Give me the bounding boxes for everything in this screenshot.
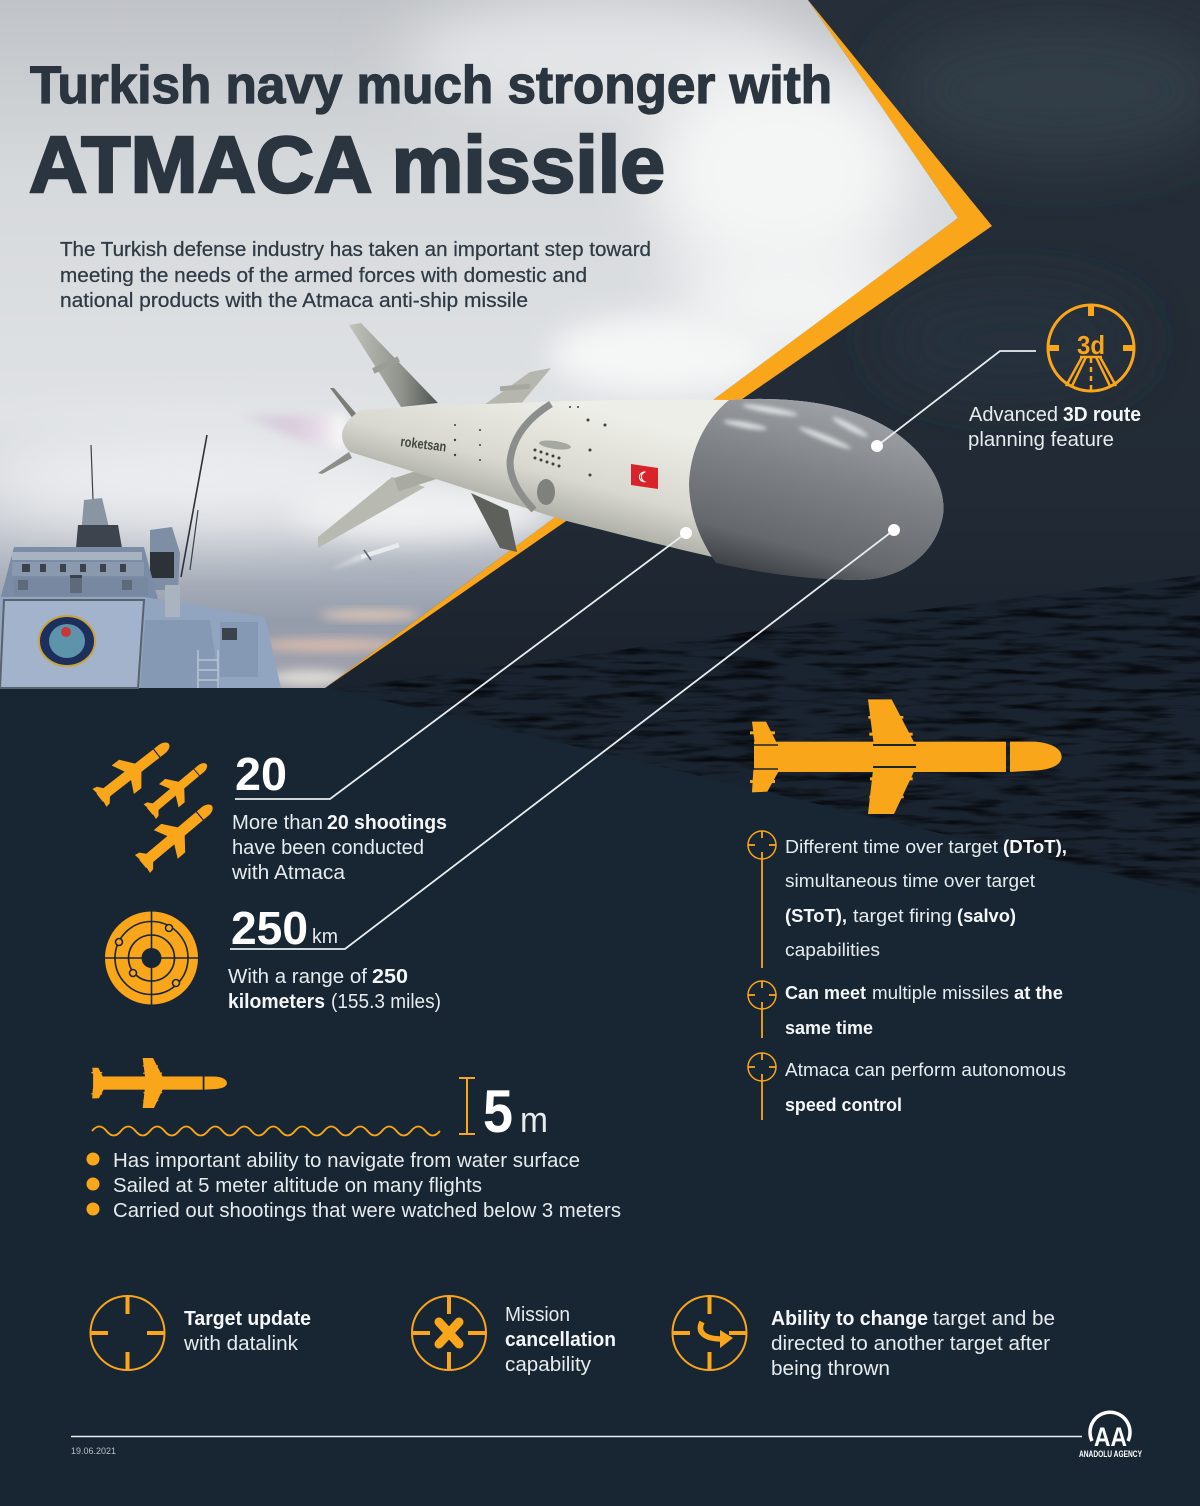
- turkish flag: [631, 464, 658, 489]
- background: dark sea: [325, 570, 1200, 905]
- missile exhaust: [240, 415, 345, 450]
- missile body: [342, 399, 943, 580]
- capability list: multiple missiles: Can meet: [785, 982, 866, 1003]
- icon: radar target: [105, 911, 198, 1005]
- altitude marker: [459, 1078, 475, 1134]
- icon: sea wave: [92, 1126, 440, 1136]
- icon: mission cancel crosshair: [412, 1296, 486, 1370]
- background: dark storm sky: [300, 0, 1200, 700]
- stat: 250 km range: With a range of: [228, 966, 367, 988]
- missile band: [510, 404, 551, 510]
- title: [29, 56, 832, 209]
- capability list: time over target: capabilities: [785, 939, 880, 960]
- capability list: multiple missiles: [748, 981, 1063, 1038]
- logo: Anadolu Agency: [1079, 1412, 1142, 1460]
- rivets: [454, 406, 606, 476]
- feature: change target: Ability to change: [771, 1308, 928, 1330]
- feature: change target: directed to another target after: [771, 1333, 1050, 1355]
- main missile: [318, 323, 943, 580]
- feature: change target: [771, 1308, 1055, 1380]
- feature: mission cancellation: capability: [505, 1354, 591, 1376]
- logo: Anadolu Agency: ANADOLU AGENCY: [1079, 1449, 1142, 1460]
- capability list: multiple missiles: multiple missiles: [872, 982, 1009, 1003]
- stat: 20 shootings: [231, 748, 447, 884]
- feature: mission cancellation: Mission: [505, 1304, 570, 1326]
- stat: 250 km range: [228, 902, 441, 1013]
- intro text: meeting the needs of the armed forces with domestic and: [60, 265, 587, 287]
- panel: light sky with clouds: [0, 0, 1000, 690]
- stat: 5 m: [483, 1078, 548, 1145]
- feature: target update: with datalink: [183, 1333, 299, 1355]
- icon: change target crosshair: [672, 1296, 747, 1370]
- stat: 250 km range: km: [312, 926, 338, 948]
- capability list: speed control: [748, 1053, 1066, 1120]
- feature: target update: Target update: [184, 1308, 311, 1330]
- bullet list: sea skimming: Carried out shootings that were watched below 3 meters: [113, 1200, 621, 1222]
- stat: 5 m: m: [520, 1099, 548, 1140]
- capability list: multiple missiles: same time: [785, 1017, 873, 1038]
- icon: three missiles: [88, 730, 224, 878]
- warship: [0, 435, 281, 688]
- nose highlights: [723, 402, 869, 451]
- capability list: time over target: [748, 831, 1067, 968]
- stat: 20 shootings: with Atmaca: [231, 862, 346, 884]
- stat: 250 km range: kilometers: [228, 991, 325, 1013]
- capability list: time over target: (salvo): [957, 905, 1016, 926]
- bullet list: sea skimming: [86, 1150, 621, 1222]
- icon: 3d route: 3d: [1077, 330, 1105, 360]
- footer rule: [71, 1436, 1082, 1438]
- turkish flag: ☾: [638, 469, 651, 485]
- stat: 250 km range: 250: [231, 902, 308, 954]
- intro text: The Turkish defense industry has taken an important step toward: [60, 239, 651, 261]
- missile fins: [318, 323, 551, 552]
- orange chevron band: [325, 0, 992, 688]
- ship emblem: [39, 616, 95, 666]
- stat: 20 shootings: 20: [235, 748, 287, 800]
- icon: large missile silhouette: [750, 699, 1062, 814]
- stat: 20 shootings: 20 shootings: [327, 812, 447, 834]
- navy lower panel: [0, 688, 1200, 1506]
- callout: 3D route: planning feature: [968, 429, 1114, 451]
- stat: 250 km range: (155.3 miles): [331, 991, 441, 1013]
- capability list: time over target: (SToT),: [785, 905, 847, 926]
- feature: change target: target and be: [933, 1308, 1055, 1330]
- stat: 20 shootings: More than: [232, 812, 323, 834]
- feature: mission cancellation: cancellation: [505, 1329, 616, 1351]
- callout: 3D route: Advanced: [969, 404, 1058, 426]
- feature: change target: being thrown: [771, 1358, 890, 1380]
- icon: 3d route: [1048, 305, 1134, 391]
- leader lines: [230, 351, 1036, 949]
- capability list: speed control: speed control: [785, 1094, 902, 1115]
- capability list: multiple missiles: at the: [1014, 982, 1063, 1003]
- bullet list: sea skimming: Has important ability to navigate from water surface: [113, 1150, 580, 1172]
- roketsan logo: roketsan: [400, 433, 447, 455]
- capability list: time over target: (DToT),: [1003, 836, 1067, 857]
- small distant missile: [330, 545, 399, 570]
- capability list: time over target: Different time over target: [785, 836, 998, 857]
- missile gray nose: [689, 399, 943, 580]
- stat: 20 shootings: have been conducted: [232, 837, 424, 859]
- stat: 250 km range: 250: [372, 966, 408, 988]
- capability list: time over target: simultaneous time over target: [785, 870, 1035, 891]
- stat: 5 m: 5: [483, 1078, 513, 1145]
- capability list: speed control: Atmaca can perform autonomous: [785, 1059, 1066, 1080]
- leader dots: [680, 440, 900, 539]
- title: Turkish navy much stronger with: [30, 56, 832, 115]
- callout: 3D route: [968, 404, 1141, 451]
- feature: target update: [183, 1308, 311, 1355]
- capability list: time over target: target firing: [853, 905, 952, 926]
- icon: low-flying missile: [91, 1058, 227, 1108]
- date: 19.06.2021: [71, 1446, 116, 1457]
- icon: target update crosshair: [90, 1296, 165, 1370]
- callout: 3D route: 3D route: [1063, 404, 1141, 426]
- logo: Anadolu Agency: AA: [1094, 1422, 1127, 1452]
- bullet list: sea skimming: Sailed at 5 meter altitude on many flights: [113, 1175, 482, 1197]
- feature: mission cancellation: [505, 1304, 616, 1376]
- intro text: [60, 239, 651, 312]
- intro text: national products with the Atmaca anti-ship missile: [60, 290, 528, 312]
- title: ATMACA missile: [29, 120, 665, 209]
